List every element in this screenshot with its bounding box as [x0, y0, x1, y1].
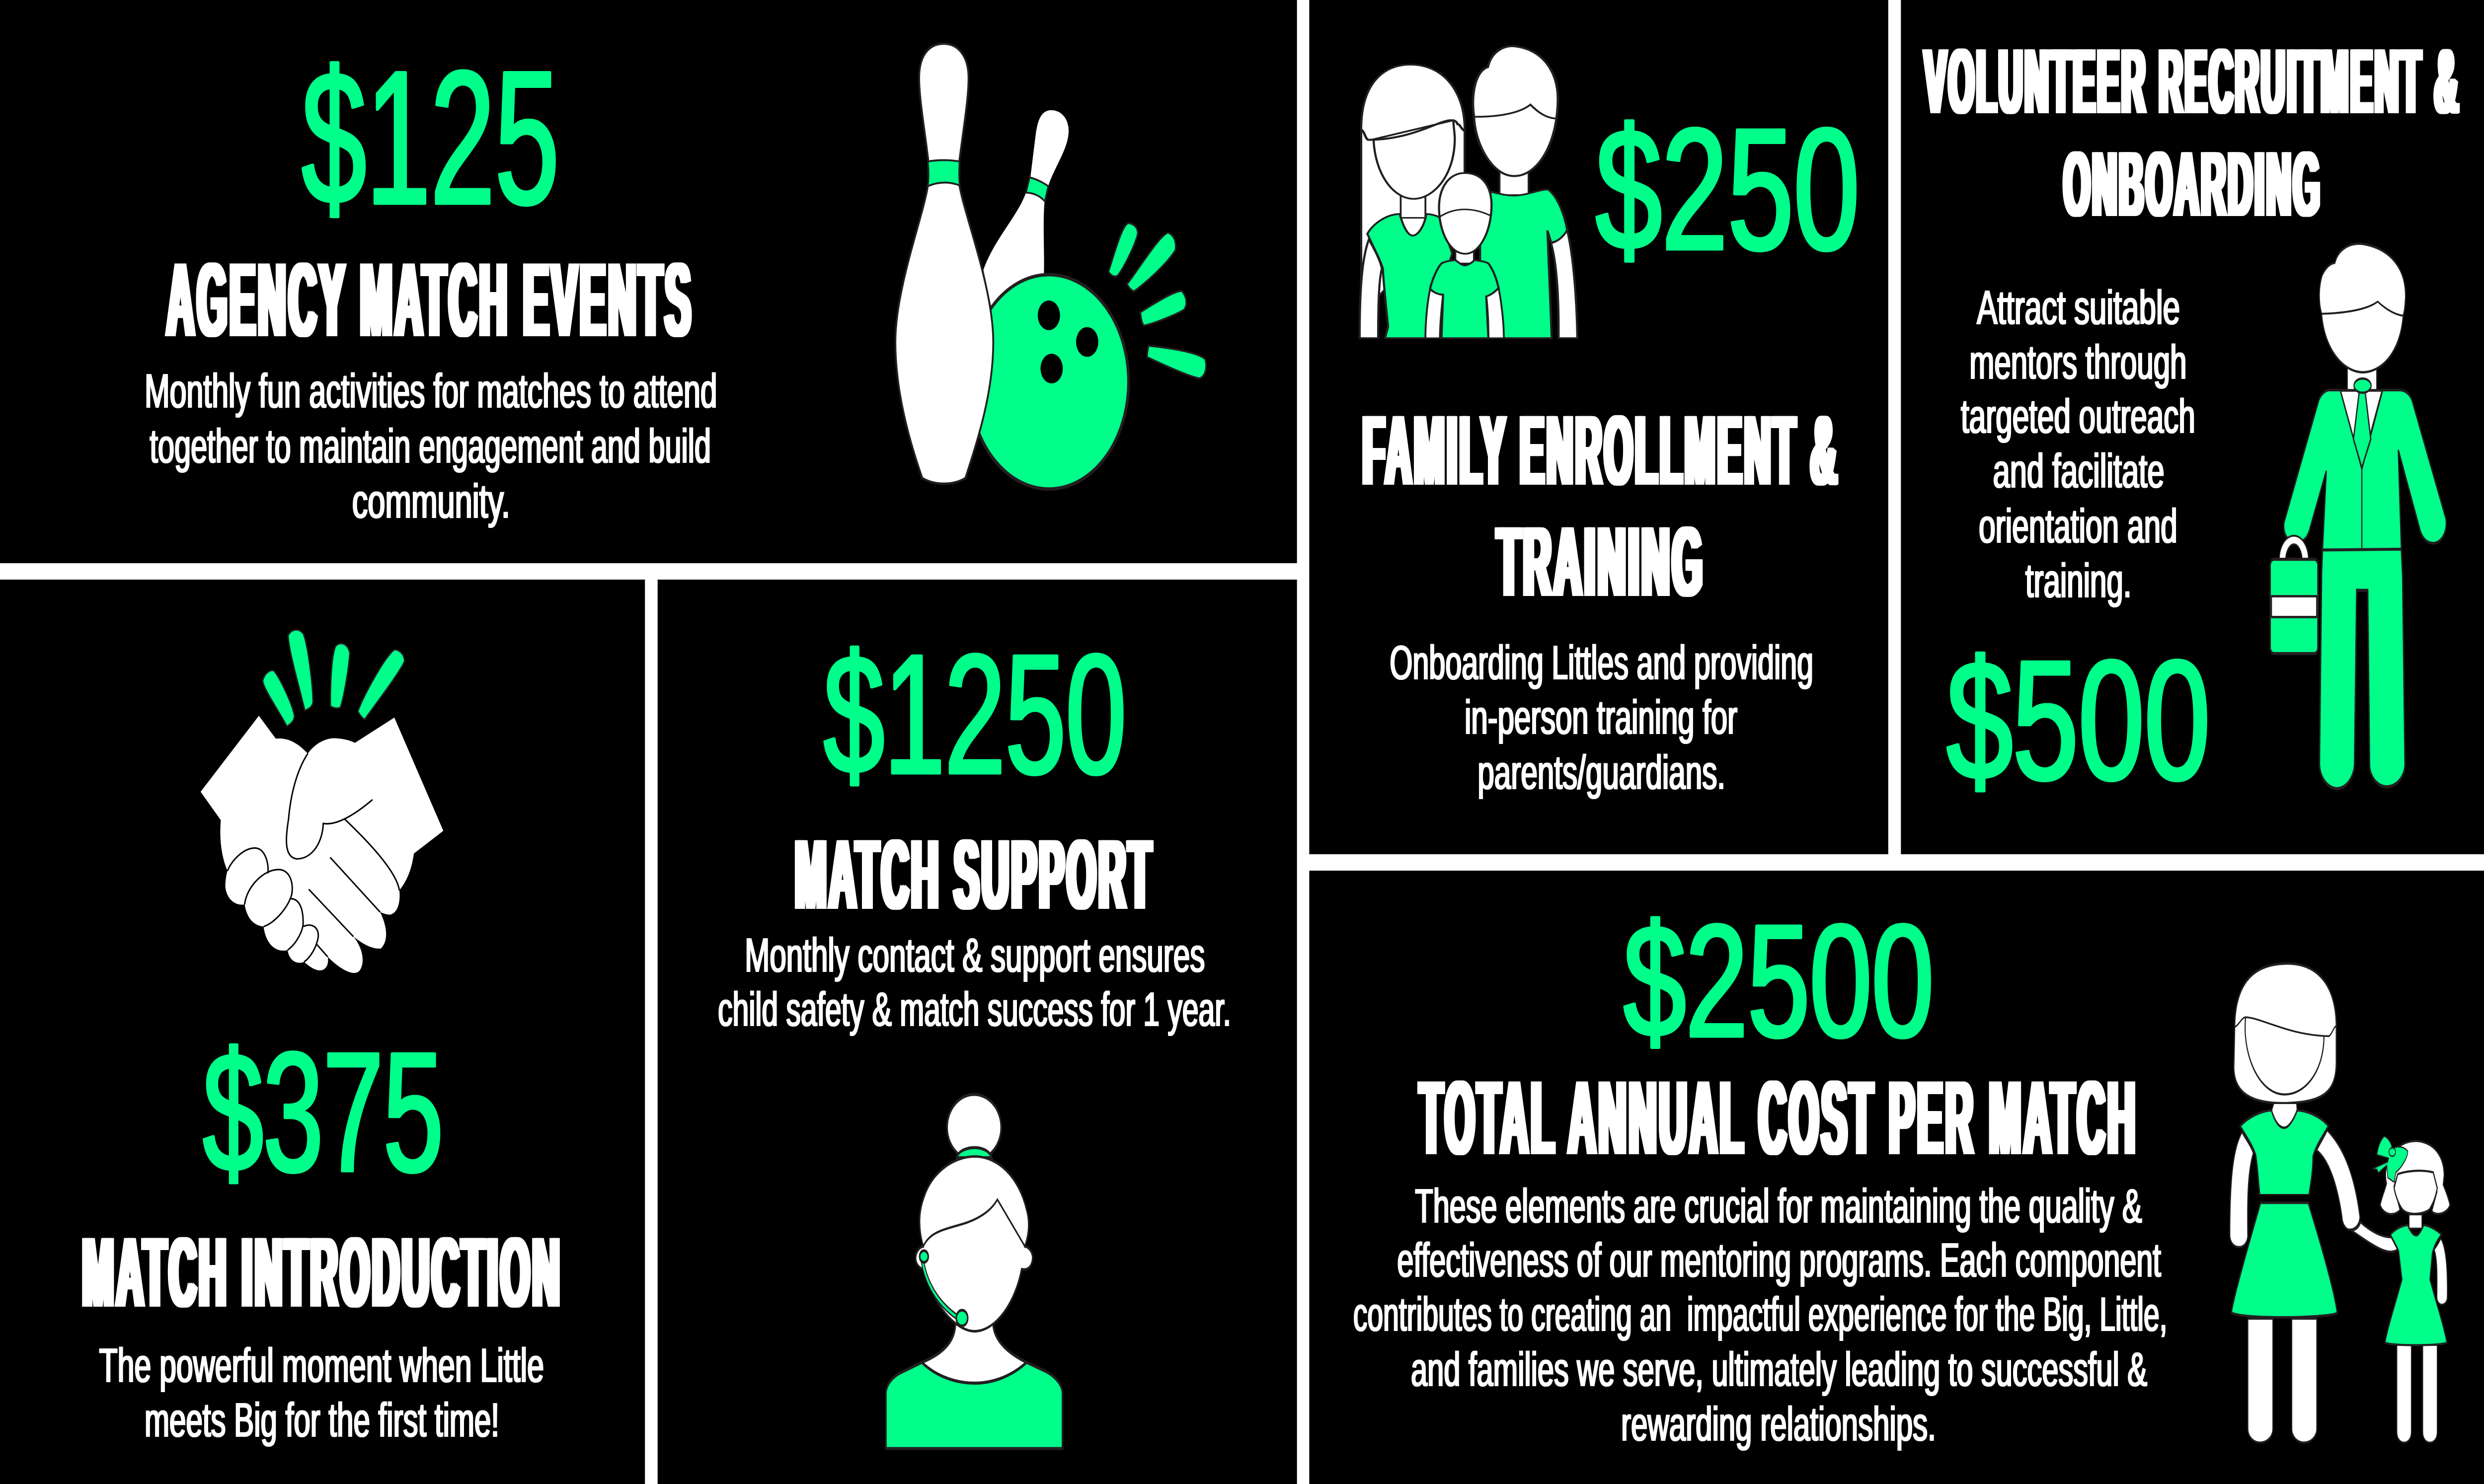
- text block: match support description: [718, 928, 1231, 1036]
- icon: bowling pins and ball: [895, 44, 1206, 489]
- text block: match introduction description: [99, 1338, 544, 1446]
- amount: $500: $500: [1947, 625, 2210, 816]
- text block: total cost description: and families we serve, ultimately leading to successful &: [1411, 1342, 2147, 1396]
- text block: total cost description: contributes to creating an impactful experience for the Big, Little,: [1353, 1287, 2168, 1340]
- icon: man in suit with briefcase: [2270, 244, 2446, 789]
- heading: family enrollment and training: TRAINING: [1497, 507, 1705, 617]
- icon: handshake: [201, 630, 443, 973]
- text block: family enrollment description: in-person training for: [1465, 690, 1737, 743]
- text block: volunteer description: Attract suitable: [1977, 281, 2180, 334]
- text block: volunteer description: orientation and: [1979, 499, 2177, 552]
- text block: total cost description: effectiveness of our mentoring programs. Each component: [1397, 1233, 2161, 1286]
- text block: total cost description: [1353, 1179, 2168, 1450]
- amount: $125: $125: [302, 31, 559, 244]
- text block: family enrollment description: [1390, 636, 1813, 799]
- panel: agency match events: AGENCY MATCH EVENTS: [166, 242, 694, 358]
- amount: $1250: $1250: [824, 619, 1126, 810]
- amount: $2500: $2500: [1624, 891, 1934, 1071]
- text block: agency match events description: Monthly fun activities for matches to attend: [145, 364, 717, 417]
- icon: support agent with headset: [886, 1095, 1063, 1449]
- text block: volunteer description: and facilitate: [1993, 444, 2165, 497]
- text block: match introduction description: meets Big for the first time!: [145, 1393, 499, 1446]
- heading: family enrollment and training: [1363, 396, 1840, 617]
- heading: match support: MATCH SUPPORT: [795, 820, 1154, 930]
- panel: match introduction: [0, 580, 645, 1484]
- text block: match support description: Monthly contact & support ensures: [745, 928, 1205, 981]
- text block: family enrollment description: parents/guardians.: [1477, 745, 1725, 799]
- panel: match support: [658, 580, 1297, 1484]
- panel: volunteer recruitment and onboarding: [1901, 0, 2484, 854]
- panel: family enrollment and training: FAMILY ENROLLMENT &: [1363, 396, 1840, 506]
- text block: agency match events description: [145, 364, 717, 527]
- text block: volunteer description: targeted outreach: [1961, 389, 2195, 443]
- panel: total annual cost per match: [1309, 871, 2484, 1484]
- text block: volunteer description: training.: [2025, 554, 2132, 607]
- text block: match introduction description: The powerful moment when Little: [99, 1338, 544, 1392]
- text block: match support description: child safety & match success for 1 year.: [718, 982, 1231, 1036]
- text block: agency match events description: together to maintain engagement and build: [150, 419, 711, 472]
- text block: volunteer description: mentors through: [1969, 335, 2187, 388]
- icon: family of three: [1360, 46, 1577, 338]
- text block: volunteer description: [1961, 281, 2195, 607]
- text block: family enrollment description: Onboarding Littles and providing: [1390, 636, 1813, 689]
- text block: total cost description: rewarding relationships.: [1621, 1397, 1936, 1450]
- panel: family enrollment and training: [1309, 0, 1888, 854]
- heading: volunteer recruitment and onboarding: [1925, 31, 2461, 235]
- text block: total cost description: These elements are crucial for maintaining the quality &: [1415, 1179, 2142, 1232]
- icon: big and little holding hands: [2230, 964, 2450, 1443]
- panel: agency match events: [0, 0, 1297, 563]
- heading: match introduction: MATCH INTRODUCTION: [82, 1218, 562, 1328]
- amount: $375: $375: [203, 1017, 443, 1208]
- text block: agency match events description: community.: [352, 474, 510, 527]
- amount: $250: $250: [1596, 92, 1860, 287]
